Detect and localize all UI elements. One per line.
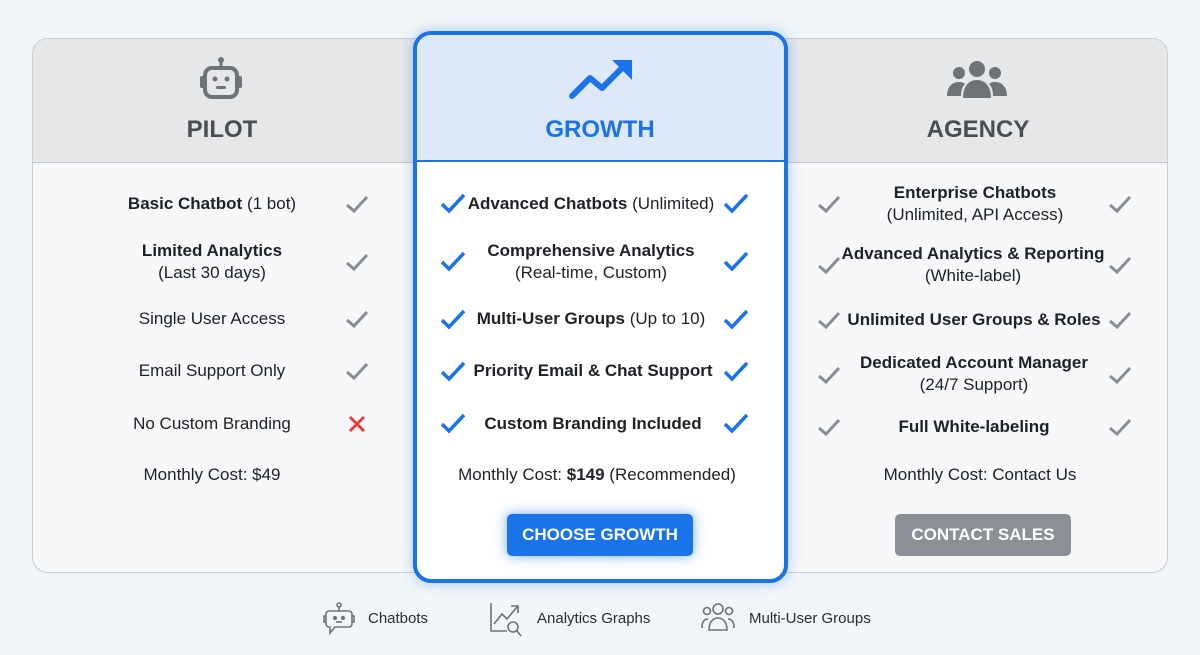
text: Full White-labeling xyxy=(898,417,1050,436)
text: Monthly Cost: $149 (Recommended) xyxy=(458,465,736,484)
list: pilot features xyxy=(128,194,368,484)
legend: analytics graphs xyxy=(490,603,650,636)
text: Single User Access xyxy=(139,309,285,328)
text: Monthly Cost: $49 xyxy=(143,465,281,484)
panel: outer table xyxy=(32,38,1168,573)
text: Enterprise Chatbots xyxy=(894,183,1056,202)
text: Advanced Chatbots (Unlimited) xyxy=(468,194,714,213)
text: Unlimited User Groups & Roles xyxy=(847,310,1101,329)
legend: chatbots: Chatbots xyxy=(368,610,428,627)
legend: analytics graphs: Analytics Graphs xyxy=(537,610,650,627)
legend: chatbots xyxy=(323,602,428,636)
text: (24/7 Support) xyxy=(920,375,1028,394)
text: (Last 30 days) xyxy=(158,263,266,282)
icon: robot xyxy=(200,57,242,99)
text: Comprehensive Analytics xyxy=(487,241,695,260)
heading: PILOT: PILOT xyxy=(187,116,257,143)
header band xyxy=(33,39,1167,163)
legend xyxy=(323,602,871,636)
button: contact sales: CONTACT SALES xyxy=(911,525,1055,544)
text: No Custom Branding xyxy=(133,414,291,433)
text: Advanced Analytics & Reporting xyxy=(842,244,1104,263)
legend: multi-user groups: Multi-User Groups xyxy=(749,610,871,627)
list: growth features xyxy=(440,194,748,484)
text: Dedicated Account Manager xyxy=(860,353,1088,372)
text: Priority Email & Chat Support xyxy=(474,361,712,380)
text: (White-label) xyxy=(925,266,1021,285)
icon: group xyxy=(947,61,1007,98)
text: Custom Branding Included xyxy=(484,414,702,433)
text: (Unlimited, API Access) xyxy=(887,205,1063,224)
legend: multi-user groups xyxy=(701,603,871,631)
button: choose growth: CHOOSE GROWTH xyxy=(522,525,678,544)
icon: growth arrow xyxy=(569,60,632,99)
text: Monthly Cost: Contact Us xyxy=(884,465,1076,484)
button: contact sales xyxy=(895,514,1071,556)
text: (Real-time, Custom) xyxy=(515,263,667,282)
button: choose growth xyxy=(507,514,693,556)
text: Basic Chatbot (1 bot) xyxy=(128,194,296,213)
text: Multi-User Groups (Up to 10) xyxy=(477,309,705,328)
heading: AGENCY: AGENCY xyxy=(927,116,1029,143)
panel: growth card xyxy=(413,31,788,583)
text: Limited Analytics xyxy=(142,241,282,260)
text: Email Support Only xyxy=(139,361,285,380)
heading: GROWTH: GROWTH xyxy=(545,116,655,143)
list: agency features xyxy=(818,183,1131,484)
